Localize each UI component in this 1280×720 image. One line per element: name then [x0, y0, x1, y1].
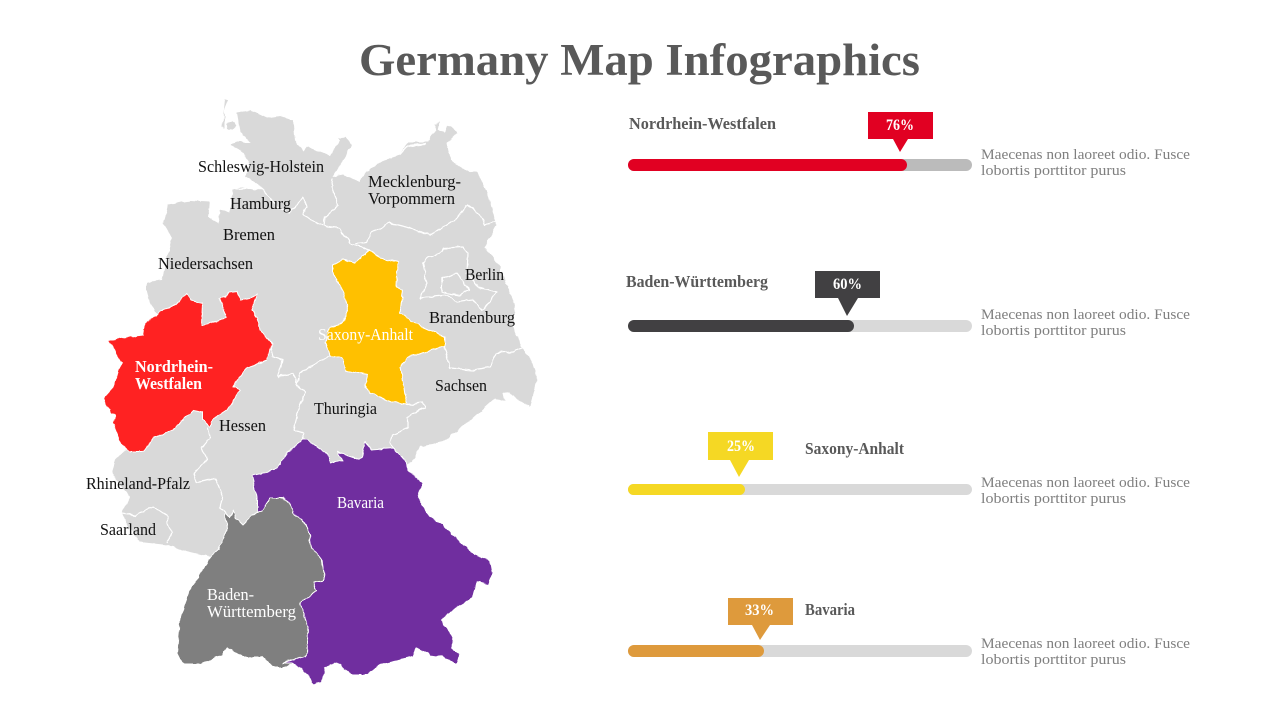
map labels: Berlin [465, 265, 504, 284]
map labels: Hamburg [230, 194, 291, 213]
map labels: Mecklenburg- [368, 172, 461, 191]
panel: Saxony-Anhalt progress: lobortis porttitor purus [981, 491, 1126, 507]
region: Nordrhein-Westfalen [103, 291, 272, 452]
map labels [86, 157, 515, 621]
panel: Bavaria progress: Bavaria [805, 600, 855, 619]
map labels: Bavaria [337, 493, 384, 512]
panel: Saxony-Anhalt progress: 25% [727, 438, 755, 455]
map labels: Saxony-Anhalt [318, 325, 413, 344]
panel: Baden-Wurttemberg progress: Baden-Württemberg [626, 272, 769, 291]
panel: Bavaria progress: lobortis porttitor purus [981, 652, 1126, 668]
panel: Baden-Wurttemberg progress [626, 271, 1190, 339]
title: Germany Map Infographics [359, 35, 920, 85]
coastal lagoons [400, 144, 478, 172]
map labels: Niedersachsen [158, 254, 253, 273]
panel: Nordrhein-Westfalen progress: lobortis porttitor purus [981, 163, 1126, 179]
panel: Nordrhein-Westfalen progress: Maecenas non laoreet odio. Fusce [981, 147, 1190, 163]
panel: Saxony-Anhalt progress: Maecenas non laoreet odio. Fusce [981, 475, 1190, 491]
map labels: Westfalen [135, 374, 202, 393]
map labels: Hessen [219, 416, 266, 435]
panel: Baden-Wurttemberg progress: 60% [833, 276, 862, 293]
map labels: Nordrhein- [135, 357, 213, 376]
region: Saxony-Anhalt [325, 250, 445, 405]
map labels: Württemberg [207, 602, 296, 621]
map labels: Saarland [100, 520, 156, 539]
panel: Bavaria progress: Maecenas non laoreet odio. Fusce [981, 636, 1190, 652]
panel: Saxony-Anhalt progress: Saxony-Anhalt [805, 439, 904, 458]
region: Bavaria [252, 440, 493, 685]
map labels: Vorpommern [368, 189, 455, 208]
panel: Nordrhein-Westfalen progress: 76% [886, 117, 914, 134]
panel: Nordrhein-Westfalen progress: Nordrhein-Westfalen [629, 114, 776, 133]
panel: Baden-Wurttemberg progress: Maecenas non laoreet odio. Fusce [981, 307, 1190, 323]
map labels: Schleswig-Holstein [198, 157, 324, 176]
map labels: Baden- [207, 585, 254, 604]
map labels: Brandenburg [429, 308, 515, 327]
region: Baden-Wurttemberg [177, 498, 325, 667]
map labels: Sachsen [435, 376, 487, 395]
map of Germany [86, 100, 537, 685]
map labels: Bremen [223, 225, 275, 244]
panel: Bavaria progress: 33% [745, 602, 774, 619]
map labels: Thuringia [314, 399, 377, 418]
panel: Nordrhein-Westfalen progress [628, 112, 1190, 179]
panel: Bavaria progress [628, 598, 1190, 668]
panel: Baden-Wurttemberg progress: lobortis porttitor purus [981, 323, 1126, 339]
map shapes [103, 100, 537, 685]
panel: Saxony-Anhalt progress [628, 432, 1190, 507]
map labels: Rhineland-Pfalz [86, 474, 190, 493]
state borders [122, 178, 522, 543]
base map: other states [112, 100, 537, 560]
